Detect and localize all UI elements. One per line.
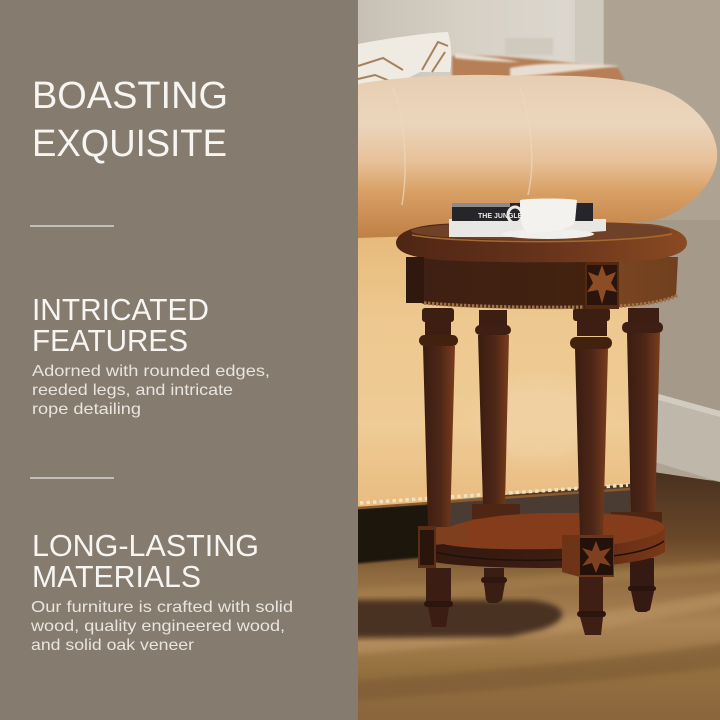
heading: intricated features: FEATURES	[32, 323, 188, 358]
apron	[406, 257, 678, 309]
decorative pillow	[358, 32, 451, 85]
text: long-lasting materials description: and solid oak veneer	[31, 637, 195, 654]
heading: intricated features: INTRICATED	[32, 292, 209, 327]
text: intricated features description: Adorned with rounded edges,	[32, 363, 270, 380]
shelf	[432, 513, 665, 568]
text: long-lasting materials description: wood, quality engineered wood,	[30, 618, 285, 635]
black book	[452, 203, 593, 221]
left carved block	[406, 257, 424, 303]
back right leg	[611, 308, 663, 612]
tufted sofa back	[452, 56, 630, 90]
heading: long-lasting materials: MATERIALS	[32, 559, 201, 594]
heading: intricated features	[32, 292, 209, 358]
floor shadow under table	[330, 600, 562, 638]
apron rosette block	[585, 262, 619, 309]
side table	[396, 222, 687, 635]
panel: product photo scene	[330, 0, 720, 720]
front right leg	[562, 308, 614, 635]
back left leg	[472, 310, 520, 603]
rope trim	[424, 295, 678, 307]
sofa front panel	[358, 236, 630, 508]
book title: THE JUNGLE	[478, 213, 523, 220]
saucer	[502, 229, 594, 239]
text: intricated features description: reeded legs, and intricate	[32, 382, 233, 399]
panel: text sidebar	[0, 0, 358, 720]
front left leg	[418, 308, 470, 627]
title	[32, 75, 228, 165]
wood floor	[330, 470, 720, 720]
rosette carved block	[580, 538, 613, 575]
baseboard	[655, 393, 720, 482]
title: EXQUISITE	[32, 123, 227, 165]
heading: long-lasting materials	[32, 528, 259, 594]
table top rim	[396, 222, 687, 262]
books and cup	[449, 198, 606, 239]
heading: long-lasting materials: LONG-LASTING	[32, 528, 259, 563]
cup handle	[508, 207, 522, 223]
cup	[520, 198, 577, 232]
text: intricated features description: rope detailing	[32, 401, 141, 418]
nailhead trim	[360, 485, 628, 503]
background wall	[358, 0, 720, 480]
text: intricated features description	[32, 363, 270, 418]
sofa arm	[358, 75, 717, 238]
text: long-lasting materials description: Our furniture is crafted with solid	[31, 599, 293, 616]
white book	[449, 219, 606, 237]
text: long-lasting materials description	[30, 599, 293, 654]
title: BOASTING	[32, 75, 228, 117]
